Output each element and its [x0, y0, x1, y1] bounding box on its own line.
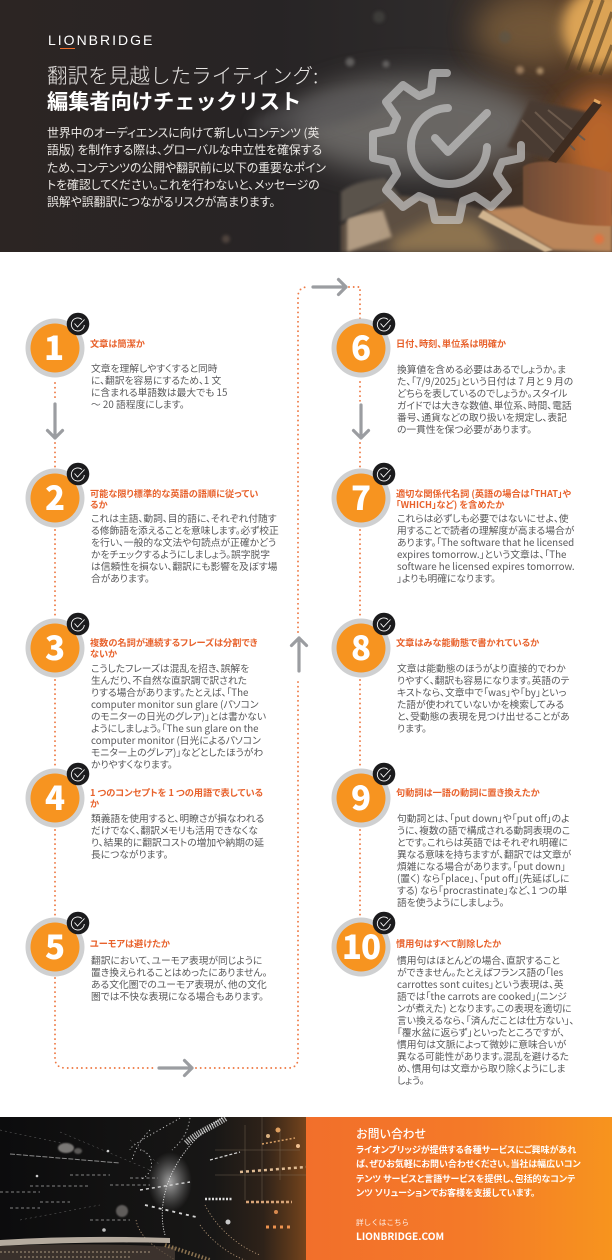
- step 8 body: ります。: [397, 721, 427, 735]
- step 10 body: 「覆水盆に返らず」といったところですが、: [397, 1025, 565, 1039]
- step 6 body: 番号、通貨などの取り扱いを規定し、表記: [397, 410, 567, 424]
- step 6 number badge: 6: [350, 322, 371, 370]
- step 5 body: 圏では不快な表現になる場合もあります。: [91, 989, 264, 1003]
- step 9 body: うに、複数の語で構成される動詞表現のこ: [397, 823, 570, 837]
- step 6 number badge: [332, 312, 396, 378]
- step 10 body: しょう。: [397, 1073, 424, 1087]
- step 2 number badge: [26, 462, 90, 528]
- step 8 body: と、受動態の表現を見つけ出せることがあ: [397, 709, 570, 723]
- intro text: 世界中のオーディエンスに向けて新しいコンテンツ (英: [47, 124, 319, 141]
- intro text: [47, 124, 326, 210]
- step 3 body: 生んだり、不自然な直訳調で訳された: [91, 673, 247, 687]
- step 1 number badge: [26, 312, 90, 378]
- step 2 heading: 可能な限り標準的な英語の語順に従ってい: [90, 486, 258, 500]
- step 8 number badge: 8: [350, 622, 371, 670]
- step 9 body: [397, 811, 571, 909]
- step 10 body: 慣用句はほとんどの場合、直訳すること: [397, 953, 560, 967]
- step 7 body: これらは必ずしも必要ではないにせよ、使: [397, 511, 569, 525]
- contact text: ば、ぜひお気軽にお問い合わせください。当社は幅広いコン: [356, 1157, 581, 1170]
- step 3 body: こうしたフレーズは混乱を招き、誤解を: [91, 661, 249, 675]
- step 8 body: キストなら、文章中で「was」や「by」といっ: [397, 685, 566, 699]
- step 6 heading: 日付、時刻、単位系は明確か: [396, 336, 506, 350]
- step 7 heading: [396, 486, 571, 511]
- step 8 body: た語が使われていないかを検索してみる: [397, 697, 564, 711]
- step 4 body: だけでなく、翻訳メモリも活用できなくな: [91, 823, 258, 837]
- step 3 body: かりやすくなります。: [91, 757, 173, 771]
- step 9 heading: 句動詞は一語の動詞に置き換えたか: [396, 785, 540, 799]
- step 4 body: [91, 811, 264, 861]
- step 9 body: する) なら「procrastinate」など、1 つの単: [397, 883, 567, 897]
- arrow: up middle: [290, 636, 308, 673]
- step 1 body: ～ 20 語程度にします。: [91, 397, 185, 411]
- step 7 body: expires tomorrow.」という文章は、「The: [397, 547, 566, 561]
- step 7 body: あります。「The software that he licensed: [397, 535, 574, 549]
- contact text: [356, 1143, 581, 1199]
- step 9 body: 語を使うようにしましょう。: [397, 895, 504, 909]
- step 6 body: ガイドでは大きな数値、単位系、時間、電話: [397, 398, 572, 412]
- step 10 heading: 慣用句はすべて削除したか: [396, 936, 501, 950]
- step 4 heading: か: [90, 796, 99, 810]
- contact link: 詳しくはこちら: [356, 1217, 409, 1228]
- step 6 body: [397, 362, 573, 436]
- step 1 body: [91, 361, 227, 411]
- step 5 body: 翻訳において、ユーモア表現が同じように: [91, 953, 262, 967]
- step 7 number badge: [332, 462, 396, 528]
- step 7 body: 用することで読者の理解度が高まる場合が: [397, 523, 574, 537]
- panel: header banner image: [0, 0, 612, 252]
- step 4 number badge: 4: [45, 772, 65, 820]
- step 9 body: とです。これらは英語ではそれぞれ明確に: [397, 835, 568, 849]
- title: [47, 59, 318, 116]
- step 6 body: た、「7/9/2025」という日付は 7 月と 9 月の: [397, 374, 573, 388]
- step 9 body: 異なる意味を持ちますが、翻訳では文章が: [397, 847, 571, 861]
- step 4 number badge: [26, 762, 90, 828]
- step 3 body: りする場合があります。たとえば、「The: [91, 685, 248, 699]
- arrow: right top: [311, 278, 348, 296]
- contact link: [356, 1217, 444, 1243]
- step 5 body: ある文化圏でのユーモア表現が、他の文化: [91, 977, 267, 991]
- step 1 body: に、翻訳を容易にするため、1 文: [91, 373, 221, 387]
- step 2 body: [91, 511, 279, 585]
- step 3 body: のモニターの日光のグレア)」とは書かない: [91, 709, 266, 723]
- step 2 body: を行い、一般的な文法や句読点が正確かどう: [91, 535, 276, 549]
- step 10 body: め、慣用句は文章から取り除くようにしま: [397, 1061, 566, 1075]
- step 8 number badge: [332, 612, 396, 678]
- step 4 heading: 1 つのコンセプトを 1 つの用語で表している: [90, 785, 263, 799]
- step 2 number badge: 2: [45, 472, 65, 520]
- step 10 body: 慣用句は文脈によって微妙に意味合いが: [397, 1037, 566, 1051]
- step 8 body: りやすく、翻訳も容易になります。英語のテ: [397, 673, 569, 687]
- step 9 body: 煩雑になる場合があります。「put down」: [397, 859, 566, 873]
- step 1 body: 文章を理解しやすくすると同時: [91, 361, 217, 375]
- contact heading: お問い合わせ: [356, 1125, 426, 1142]
- step 3 number badge: [26, 612, 90, 678]
- step 6 body: どちらを表しているのでしょうか。スタイル: [397, 386, 567, 400]
- step 3 heading: ないか: [90, 646, 117, 660]
- step 2 body: これは主語、動詞、目的語に、それぞれ付随す: [91, 511, 277, 525]
- step 2 heading: [90, 486, 258, 511]
- step 5 body: [91, 953, 267, 1003]
- step 5 number badge: 5: [45, 921, 65, 969]
- step 4 body: 長につながります。: [91, 847, 168, 861]
- step 3 body: computer monitor (日光によるパソコン: [91, 733, 261, 747]
- step 3 number badge: 3: [45, 622, 65, 670]
- step 10 body: 異なる可能性があります。混乱を避けるた: [397, 1049, 569, 1063]
- arrow: down right: [352, 403, 370, 440]
- step 8 heading: 文章はみな能動態で書かれているか: [396, 635, 539, 649]
- step 3 body: モニター上のグレア)」などとしたほうがわ: [91, 745, 263, 759]
- step 10 body: 語では「the carrots are cooked」(ニンジ: [397, 989, 567, 1003]
- intro text: 語版) を制作する際は、グローバルな中立性を確保する: [47, 141, 322, 158]
- step 9 body: (置く) なら「place」、「put off」(先延ばしに: [397, 871, 569, 885]
- step 9 body: 句動詞とは、「put down」や「put off」のよ: [397, 811, 570, 825]
- step 7 heading: 適切な関係代名詞 (英語の場合は「THAT」や: [396, 486, 571, 500]
- title: 編集者向けチェックリスト: [47, 85, 301, 116]
- intro text: 誤解や誤翻訳につながるリスクが高まります。: [47, 193, 275, 210]
- step 3 body: ようにしましょう。「The sun glare on the: [91, 721, 259, 735]
- step 1 number badge: 1: [44, 322, 64, 370]
- step 3 heading: 複数の名詞が連続するフレーズは分割でき: [90, 635, 258, 649]
- step 9 number badge: [332, 762, 396, 828]
- step 4 body: り、結果的に翻訳コストの増加や納期の延: [91, 835, 264, 849]
- step 6 body: 換算値を含める必要はあるでしょうか。ま: [397, 362, 566, 376]
- step 10 body: ができません。たとえばフランス語の「les: [397, 965, 563, 979]
- step 2 body: る修飾語を添えることを意味します。必ず校正: [91, 523, 279, 537]
- intro text: ため、コンテンツの公開や翻訳前に以下の重要なポイン: [47, 159, 326, 176]
- step 8 body: [397, 661, 570, 735]
- footer image: digital globe: [0, 1117, 306, 1260]
- step 1 body: に含まれる単語数は最大でも 15: [91, 385, 227, 399]
- arrow: right bottom: [157, 1058, 194, 1078]
- step 9 number badge: 9: [350, 772, 371, 820]
- step 2 body: は信頼性を損ない、翻訳にも影響を及ぼす場: [91, 559, 277, 573]
- intro text: トを確認してください。これを行わないと、メッセージの: [47, 176, 320, 193]
- step 6 body: の一貫性を保つ必要があります。: [397, 422, 532, 436]
- step 5 heading: ユーモアは避けたか: [90, 936, 170, 950]
- step 7 number badge: 7: [350, 472, 371, 520]
- step 3 body: [91, 661, 266, 771]
- step 5 number badge: [26, 912, 90, 976]
- panel: contact: [306, 1117, 612, 1260]
- contact link: LIONBRIDGE.COM: [356, 1228, 444, 1243]
- step 10 body: [397, 953, 574, 1087]
- step 4 body: 類義語を使用すると、明瞭さが損なわれる: [91, 811, 264, 825]
- step 2 body: かをチェックするようにしましょう。誤字脱字: [91, 547, 270, 561]
- step 3 body: computer monitor sun glare (パソコン: [91, 697, 259, 711]
- step 10 number badge: [332, 912, 396, 976]
- step 7 body: 」よりも明確になります。: [397, 571, 496, 585]
- step 7 body: [397, 511, 575, 585]
- step 3 heading: [90, 635, 258, 660]
- arrow: down left: [46, 402, 64, 440]
- logo: Lionbridge: LIONBRIDGE: [48, 32, 154, 48]
- step 10 body: carrottes sont cuites」という表現は、英: [397, 977, 564, 991]
- step 5 body: 置き換えられることはめったにありません。: [91, 965, 267, 979]
- step 7 heading: 「WHICH」など) を含めたか: [396, 497, 504, 511]
- icon: gear with checkmark: [369, 69, 525, 224]
- step 2 heading: るか: [90, 497, 108, 511]
- dotted path connecting steps: [54, 286, 361, 1069]
- contact text: ライオンブリッジが提供する各種サービスにご興味があれ: [356, 1143, 576, 1156]
- step 10 body: 言い換えるなら、「済んだことは仕方ない」、: [397, 1013, 574, 1027]
- step 10 number badge: 10: [341, 921, 380, 969]
- step 2 body: 合があります。: [91, 571, 150, 585]
- step 10 body: ンが煮えた) となります。この表現を適切に: [397, 1001, 571, 1015]
- step 7 body: software he licensed expires tomorrow.: [397, 559, 575, 573]
- title: 翻訳を見越したライティング:: [47, 59, 318, 89]
- contact text: ンツ ソリューションでお客様を支援しています。: [356, 1186, 535, 1199]
- step 8 body: 文章は能動態のほうがより直接的でわか: [397, 661, 566, 675]
- contact text: テンツ サービスと言語サービスを提供し、包括的なコンテ: [356, 1172, 575, 1185]
- step 4 heading: [90, 785, 263, 810]
- step 1 heading: 文章は簡潔か: [90, 336, 145, 350]
